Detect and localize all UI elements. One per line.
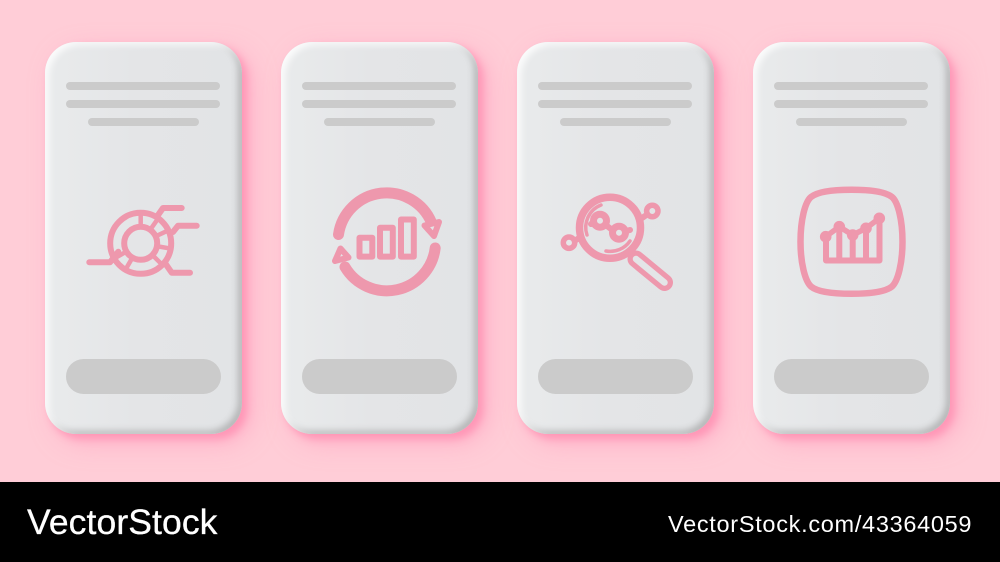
button placeholder	[66, 359, 220, 394]
icon: segmented donut chart with callouts	[86, 205, 200, 277]
icon: magnifier over line graph	[560, 194, 673, 291]
panel: card 3	[517, 42, 714, 434]
brand wordmark: VectorStock	[27, 502, 218, 542]
button placeholder	[538, 359, 692, 394]
icon: bar chart in refresh arrows	[332, 187, 442, 296]
text placeholder lines	[538, 82, 692, 126]
text placeholder lines	[302, 82, 456, 126]
text placeholder lines	[774, 82, 928, 126]
button placeholder	[302, 359, 456, 394]
image id url: VectorStock.com/43364059	[668, 511, 972, 537]
button placeholder	[774, 359, 928, 394]
panel: card 2	[281, 42, 478, 434]
icon: area chart in rounded frame	[797, 186, 906, 297]
panel: card 4	[753, 42, 950, 434]
footer bar	[0, 482, 1000, 562]
text placeholder lines	[66, 82, 220, 126]
panel: card 1	[45, 42, 242, 434]
